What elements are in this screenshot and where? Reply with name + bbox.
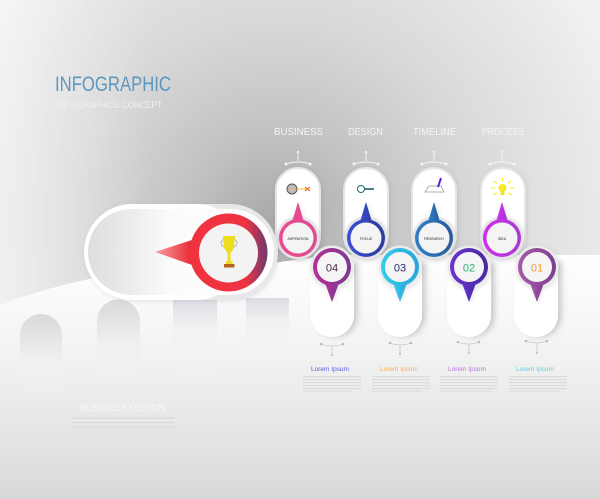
top ring: aspiration: ASPIRATION <box>288 237 309 241</box>
column headings: DESIGN <box>348 126 383 138</box>
panel: lower pills <box>310 262 558 337</box>
lower ring: 01: 01 <box>531 262 543 274</box>
subtitle: INFOGRAPHICS CONCEPT <box>57 100 162 111</box>
top ring: idea: IDEA <box>498 237 507 241</box>
top ring: focus: FOCUS <box>360 237 373 241</box>
icon: pen and paper <box>425 178 444 192</box>
top ring: research: RESEARCH <box>424 237 444 241</box>
icon: trophy <box>221 236 237 268</box>
lorem ipsum headings: Lorem Ipsum <box>380 366 418 373</box>
top ring: research <box>412 202 456 260</box>
red ring <box>190 214 268 292</box>
top ring: focus <box>344 202 388 260</box>
lorem ipsum headings: Lorem Ipsum <box>448 366 486 373</box>
lower ring: 01 <box>516 246 558 302</box>
lorem ipsum headings: Lorem Ipsum <box>516 366 554 373</box>
footer text lines <box>72 418 175 428</box>
top ring: idea <box>480 202 524 260</box>
column headings: PROCESS <box>482 126 524 138</box>
lower ring: 04: 04 <box>326 262 338 274</box>
lorem ipsum headings: Lorem Ipsum <box>311 366 349 373</box>
title: INFOGRAPHIC <box>55 72 171 96</box>
footer heading: BUSINESS DESIGN <box>80 403 165 414</box>
lower ring: 02: 02 <box>463 262 475 274</box>
icon: dart target <box>287 184 310 194</box>
bottom connectors <box>320 340 548 356</box>
ring centre <box>199 224 258 282</box>
lower ring: 04 <box>310 246 354 302</box>
main pill: red trophy card <box>84 204 278 300</box>
panel: top pills <box>276 168 525 258</box>
red pointer <box>155 239 195 266</box>
lower ring: 02 <box>448 246 490 302</box>
top connectors <box>284 151 516 166</box>
lower ring: 03: 03 <box>394 262 406 274</box>
icon: light bulb <box>491 178 514 195</box>
background: lower white curved panel <box>0 255 600 499</box>
lorem ipsum headings <box>311 366 554 373</box>
icon: magnifier <box>358 186 374 192</box>
column headings: TIMELINE <box>413 126 456 138</box>
top ring: aspiration <box>276 202 320 260</box>
arches: fading lower-left shapes <box>20 298 289 400</box>
lorem ipsum body text lines <box>303 376 567 392</box>
column headings: BUSINESS <box>274 126 323 138</box>
column headings <box>274 126 524 138</box>
lower ring: 03 <box>378 246 422 302</box>
